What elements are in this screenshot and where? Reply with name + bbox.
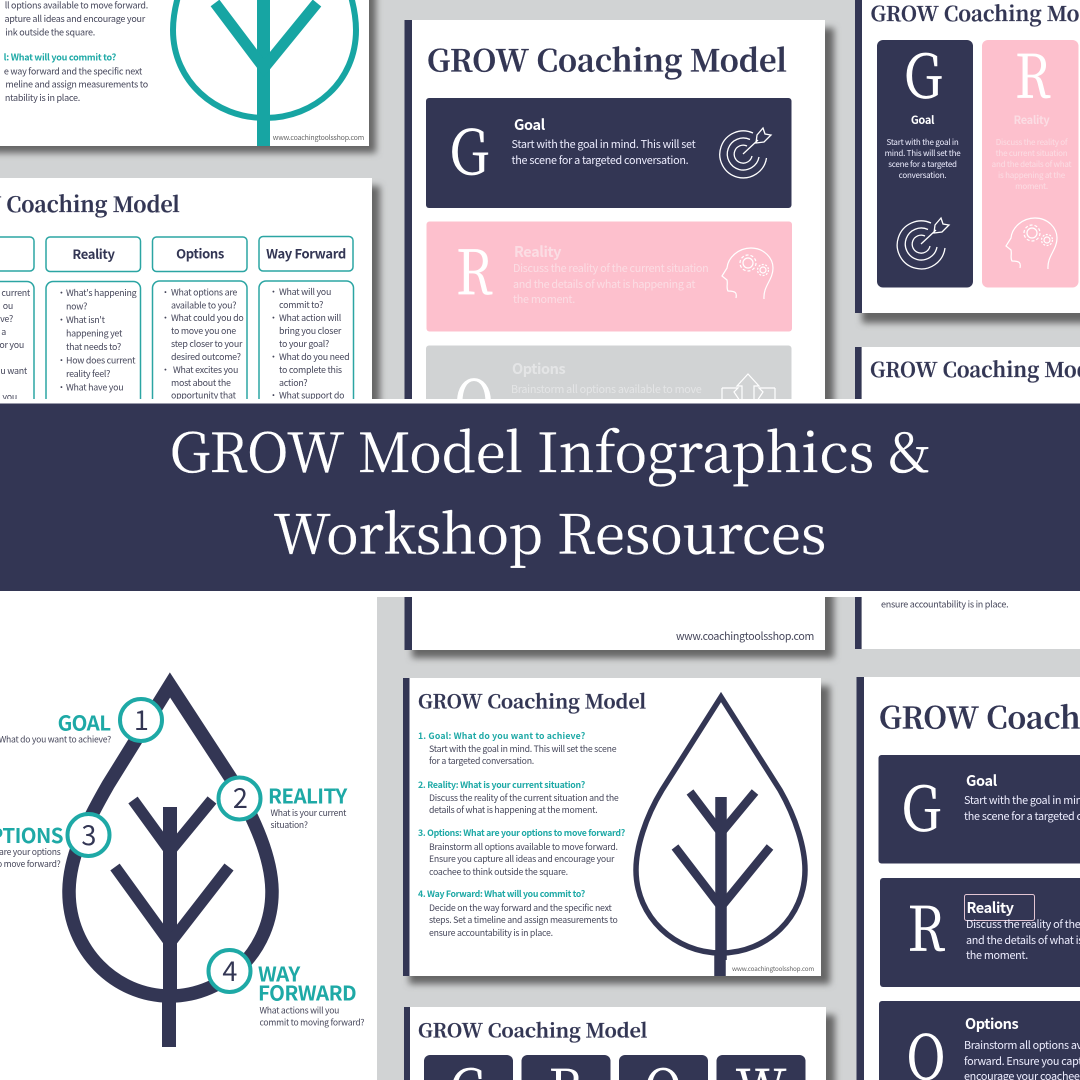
title banner: Workshop Resources bbox=[274, 492, 826, 570]
column text: • bbox=[269, 350, 278, 363]
column text: • bbox=[269, 311, 278, 324]
row: Options: Options bbox=[512, 358, 566, 379]
column text: action? bbox=[279, 376, 307, 389]
text block: options and way forward steps: apture all ideas and encourage your bbox=[4, 12, 146, 25]
column text: bring you closer bbox=[279, 324, 342, 337]
column: Goal: conversation. bbox=[899, 170, 946, 181]
row: Reality: Discuss the reality of the current situation bbox=[513, 260, 708, 276]
icon: head with gears bbox=[1006, 218, 1057, 269]
numbered list: 3. Options: What are your options to move forward? bbox=[418, 826, 626, 839]
row: Goal bbox=[878, 755, 1080, 864]
row: Reality: R bbox=[456, 225, 493, 312]
footer url: www.coachingtoolsshop.com bbox=[676, 629, 814, 644]
icon: teal tree leaf bbox=[173, 0, 356, 146]
panel: leaf diagram bbox=[0, 590, 377, 1080]
row: Goal: the scene for a targeted conversation. bbox=[512, 152, 689, 168]
column text: What support do bbox=[279, 388, 344, 402]
step 3: options: 3 bbox=[81, 814, 96, 853]
step 1: goal: GOAL bbox=[58, 706, 111, 736]
row: Goal: Goal bbox=[514, 114, 546, 135]
panel: centre card with horizontal GROW rows bbox=[404, 20, 834, 658]
heading: GROW Coaching Model bbox=[418, 686, 646, 714]
column: Goal: G bbox=[904, 30, 942, 116]
step 4: way forward: 4 bbox=[222, 950, 237, 989]
row: Reality: R bbox=[908, 882, 946, 968]
row: Reality bbox=[880, 878, 1080, 987]
row: Reality: and the details of what is happening at bbox=[513, 276, 695, 292]
row: Goal: G bbox=[450, 105, 488, 192]
step 4: way forward: commit to moving forward? bbox=[260, 1016, 364, 1028]
numbered list: Decide on the way forward and the specific next bbox=[429, 901, 612, 914]
column text: now? bbox=[66, 300, 87, 312]
column: Goal: Start with the goal in bbox=[886, 137, 959, 148]
numbered list: Brainstorm all options available to move forward. bbox=[429, 840, 618, 853]
panel: bottom-right card with navy rows bbox=[856, 677, 1080, 1080]
text block: options and way forward steps: meline and assign measurements to bbox=[5, 78, 148, 90]
numbered list: ensure accountability is in place. bbox=[429, 926, 553, 939]
column text: desired outcome? bbox=[171, 350, 241, 363]
step 2: reality: REALITY bbox=[268, 780, 348, 810]
column: Goal: mind. This will set the bbox=[885, 148, 961, 159]
column: Reality: and the details of what bbox=[992, 159, 1072, 170]
footer url: www.coachingtoolsshop.com bbox=[273, 133, 364, 143]
text block: options and way forward steps: l: What will you commit to? bbox=[4, 50, 117, 64]
column text: What could you do bbox=[171, 311, 243, 324]
column text: to your goal? bbox=[279, 337, 329, 350]
column text: ve? bbox=[0, 312, 13, 325]
icon: target bbox=[897, 218, 949, 269]
step 1: goal bbox=[0, 699, 162, 746]
icon: navy leaf tree bbox=[636, 697, 805, 976]
column text: What excites you bbox=[173, 363, 238, 376]
row: Reality bbox=[426, 222, 792, 332]
column text: What's happening bbox=[66, 286, 137, 299]
text block: options and way forward steps: ntability is in place. bbox=[5, 91, 80, 104]
column text: ou bbox=[3, 299, 13, 312]
column: Goal bbox=[877, 30, 973, 288]
column text: • bbox=[161, 286, 170, 298]
column text: • bbox=[57, 286, 66, 299]
column text: What will you bbox=[279, 285, 331, 298]
column: Reality: R bbox=[1015, 30, 1051, 116]
step 4: way forward: FORWARD bbox=[258, 976, 356, 1006]
step 2: reality: 2 bbox=[233, 777, 247, 816]
step 1: goal: 1 bbox=[134, 699, 148, 738]
heading: GROW Coaching Model bbox=[418, 1016, 647, 1044]
column text: happening yet bbox=[66, 326, 123, 340]
row: Options: Brainstorm all options available to move bbox=[511, 381, 702, 397]
title banner bbox=[0, 399, 1080, 597]
panel: centre lower numbered card with navy tree bbox=[403, 678, 830, 984]
numbered list: details of what is happening at the moment. bbox=[429, 803, 597, 816]
column text: available to you? bbox=[171, 298, 236, 312]
panel: bottom centre card with GROW tiles bbox=[404, 1007, 835, 1080]
numbered list: 1. Goal: What do you want to achieve? bbox=[418, 729, 586, 742]
numbered list: 2. Reality: What is your current situation? bbox=[418, 778, 586, 791]
column text: a bbox=[1, 325, 6, 338]
row: Options: Options bbox=[965, 1013, 1019, 1034]
icon: three arrows bbox=[722, 374, 775, 404]
heading: GROW Coaching Model bbox=[427, 36, 787, 80]
column: Reality: the current situation bbox=[996, 148, 1068, 159]
column text: reality feel? bbox=[66, 367, 110, 380]
panel: top-left numbered card with teal tree bbox=[0, 0, 376, 153]
panel: question columns card: Options bbox=[176, 244, 224, 262]
column text bbox=[0, 285, 349, 403]
column text: • bbox=[57, 354, 66, 366]
step 4: way forward: WAY bbox=[258, 958, 301, 988]
column text: to complete this bbox=[279, 363, 342, 376]
text block: options and way forward steps bbox=[4, 0, 148, 104]
numbered list: Ensure you capture all ideas and encourage your bbox=[429, 852, 615, 865]
column headers bbox=[0, 236, 354, 422]
column text: u want bbox=[0, 364, 28, 377]
step 3: options bbox=[0, 814, 110, 870]
row: Reality: Reality bbox=[966, 897, 1015, 918]
column: Reality: Reality bbox=[1014, 112, 1050, 128]
footer url: www.coachingtoolsshop.com bbox=[732, 964, 814, 973]
numbered list: for a targeted conversation. bbox=[429, 754, 534, 767]
step 1: goal: What do you want to achieve? bbox=[0, 734, 111, 746]
numbered list: Discuss the reality of the current situation and the bbox=[429, 791, 619, 804]
numbered list bbox=[418, 729, 626, 939]
column: Reality bbox=[982, 30, 1078, 288]
row: Reality: Reality bbox=[514, 241, 562, 262]
column text: • bbox=[161, 363, 170, 376]
row: Options bbox=[426, 346, 792, 456]
column: Reality: moment. bbox=[1015, 181, 1048, 192]
numbered list: steps. Set a timeline and assign measurements to bbox=[429, 913, 618, 926]
row: Reality: the moment. bbox=[513, 291, 575, 307]
column text: to move you one bbox=[171, 324, 236, 337]
panel: question columns card: Reality bbox=[72, 244, 115, 263]
icon: target bbox=[720, 128, 771, 178]
panel: question columns card: Way Forward bbox=[266, 244, 346, 262]
icon: head with gears bbox=[722, 248, 773, 299]
tiles bbox=[424, 1049, 806, 1080]
text block: options and way forward steps: ink outside the square. bbox=[5, 26, 95, 38]
column text: • bbox=[57, 313, 66, 326]
column text: • bbox=[57, 380, 66, 394]
numbered list: Start with the goal in mind. This will set the scene bbox=[429, 742, 617, 755]
column text: most about the bbox=[171, 376, 231, 389]
column text: What do you need bbox=[279, 350, 349, 363]
panel: right middle card bbox=[855, 347, 1080, 649]
column text: What isn't bbox=[66, 313, 106, 326]
column text: commit to? bbox=[279, 298, 323, 311]
step 2: reality: What is your current bbox=[270, 807, 347, 819]
column: Goal: scene for a targeted bbox=[888, 159, 957, 170]
row: Goal: Goal bbox=[966, 770, 998, 791]
row: Options: O bbox=[454, 355, 494, 442]
column text: How does current bbox=[66, 354, 136, 366]
step 2: reality: situation? bbox=[270, 819, 308, 831]
row: Options bbox=[879, 1001, 1080, 1080]
column text: step closer to your bbox=[171, 337, 243, 350]
row: Goal: Start with the goal in mind. This will set bbox=[512, 136, 696, 152]
column text: • bbox=[269, 285, 278, 298]
column text: What have you bbox=[66, 380, 123, 394]
title banner: GROW Model Infographics & bbox=[170, 410, 930, 488]
column: Goal: Goal bbox=[911, 112, 935, 128]
column text: current bbox=[1, 286, 31, 299]
row: Goal bbox=[426, 98, 792, 208]
step 4: way forward: What actions will you bbox=[260, 1004, 339, 1016]
icon: large navy leaf tree bbox=[69, 685, 272, 1047]
column: Reality: is happening at the bbox=[998, 170, 1066, 181]
text fragment: ensure accountability is in place. bbox=[881, 598, 1008, 610]
panel: question columns card bbox=[0, 178, 380, 422]
column text: that needs to? bbox=[66, 340, 121, 353]
row: Goal: G bbox=[902, 762, 940, 848]
numbered list: coachee to think outside the square. bbox=[429, 865, 568, 878]
step 2: reality bbox=[218, 777, 348, 831]
column text: • bbox=[269, 388, 278, 402]
column text: or you bbox=[0, 338, 24, 351]
text block: options and way forward steps: e way forward and the specific next bbox=[4, 64, 143, 78]
column text: • bbox=[161, 311, 170, 324]
step 4: way forward bbox=[208, 950, 364, 1028]
numbered list: 4. Way Forward: What will you commit to? bbox=[418, 887, 586, 900]
column text: opportunity that bbox=[171, 388, 237, 402]
row: Reality: the moment. bbox=[966, 947, 1028, 963]
column text: What options are bbox=[171, 286, 237, 298]
column: Reality: Discuss the reality of bbox=[996, 137, 1068, 148]
column text: What action will bbox=[279, 311, 342, 324]
panel: top-right card with vertical GROW columns bbox=[855, 0, 1080, 323]
